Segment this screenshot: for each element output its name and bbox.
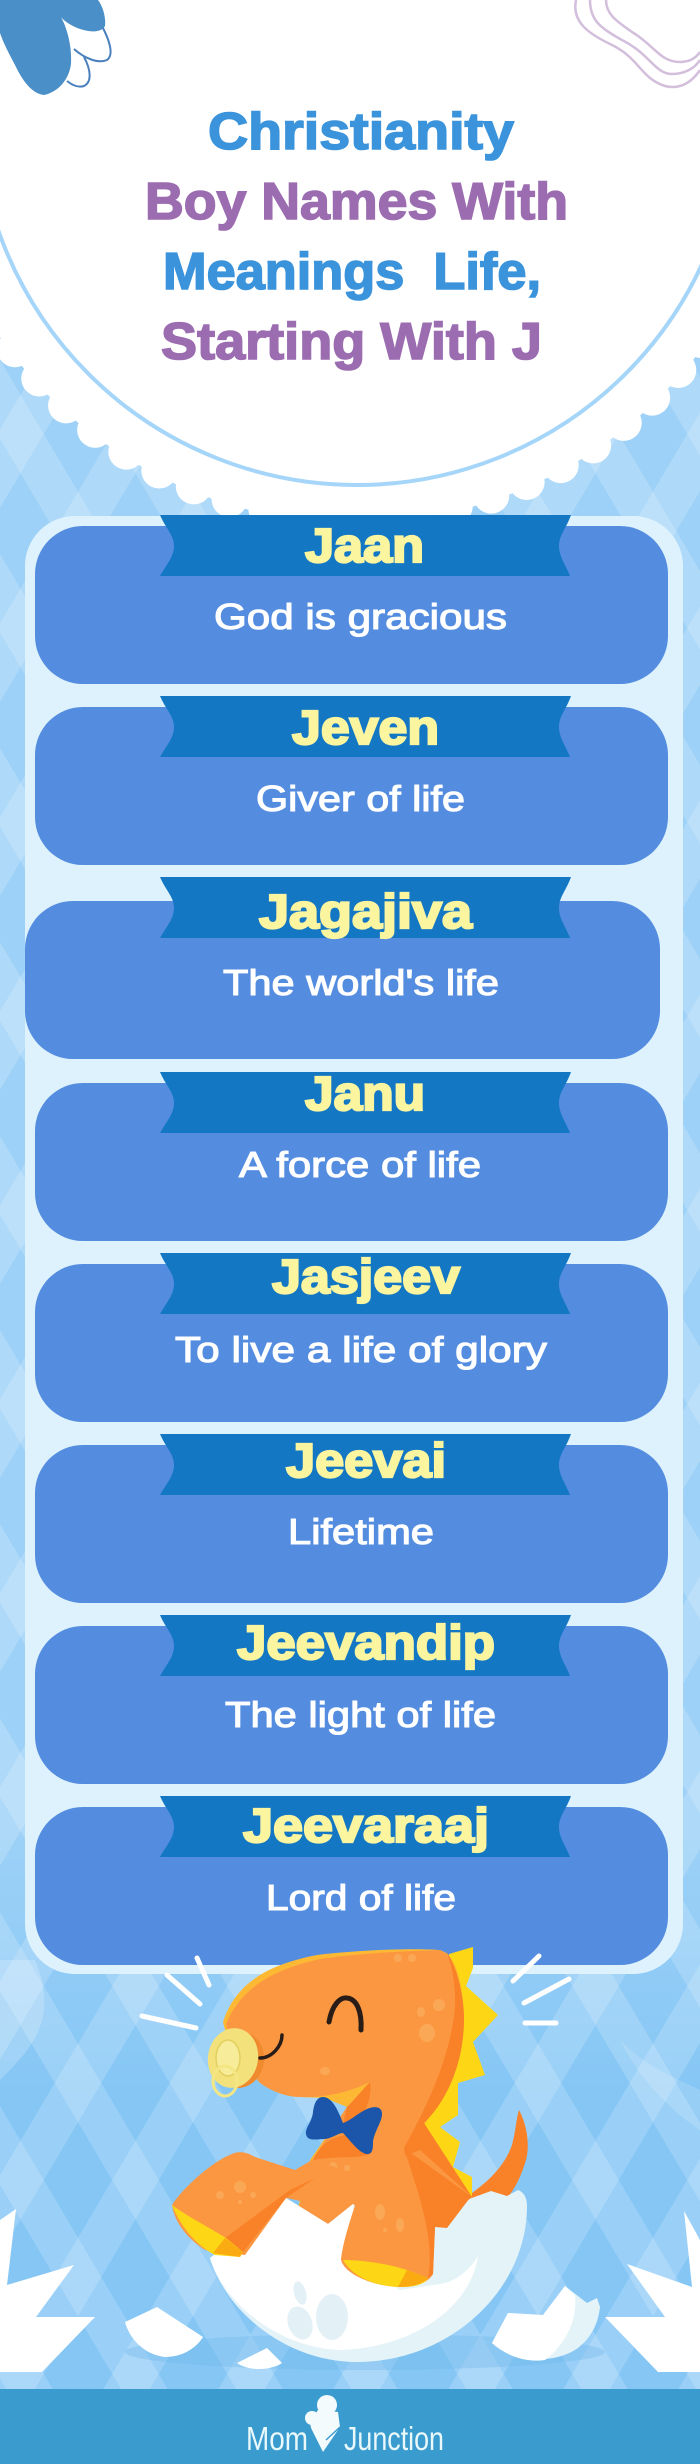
back spikes xyxy=(420,1947,498,2205)
egg shell shard small xyxy=(237,2348,282,2369)
card: Jeevaraaj: Jeevaraaj xyxy=(243,1800,489,1853)
chin shade xyxy=(343,2082,370,2125)
card: Jeven: Jeven xyxy=(292,702,439,755)
icon: hatching baby dinosaur xyxy=(125,1947,605,2370)
panel: names list background xyxy=(25,516,683,1974)
white corner shapes right xyxy=(605,2211,700,2372)
logo: MomJunction: Mom xyxy=(246,2420,308,2457)
footer bar xyxy=(0,2389,700,2464)
bow tie xyxy=(306,2097,382,2154)
title: Christianity xyxy=(208,103,514,161)
egg footprints xyxy=(283,2280,348,2343)
card: Jeevandip xyxy=(35,1615,668,1784)
body spots xyxy=(320,1954,445,2178)
card: Janu: Janu xyxy=(305,1068,425,1121)
logo: MomJunction xyxy=(246,2395,444,2457)
icon: blue corner leaves xyxy=(0,0,111,95)
card: Jagajiva xyxy=(25,877,660,1059)
darker back shade xyxy=(404,1951,472,2240)
card: Jeevai: Lifetime xyxy=(288,1511,434,1552)
card: Jagajiva: Jagajiva xyxy=(259,886,472,939)
egg white highlight xyxy=(210,2198,478,2350)
card: Jeevandip: Jeevandip xyxy=(237,1617,495,1670)
front leg xyxy=(341,2148,472,2287)
pacifier xyxy=(203,2024,269,2096)
egg shell shard right xyxy=(492,2286,600,2361)
card: Janu: A force of life xyxy=(239,1144,481,1185)
sparkle lines xyxy=(142,1956,569,2028)
white scalloped header circle xyxy=(0,0,700,523)
egg shell xyxy=(210,2190,527,2362)
card: Jaan: God is gracious xyxy=(214,596,507,637)
card: Jeevai xyxy=(35,1434,668,1603)
card: Jeevaraaj xyxy=(35,1796,668,1965)
card: Jaan: Jaan xyxy=(305,520,424,573)
card: Jasjeev: Jasjeev xyxy=(272,1251,460,1304)
card: Jeevandip: The light of life xyxy=(225,1694,496,1735)
card: Jaan xyxy=(35,515,668,684)
card: Jeven: Giver of life xyxy=(256,778,465,819)
torso and head edge xyxy=(223,1949,472,2240)
title: Meanings Life, xyxy=(163,243,541,301)
icon: lilac squiggle lines xyxy=(575,0,700,87)
torso and head xyxy=(226,1950,472,2240)
title xyxy=(145,103,568,371)
title: Starting With J xyxy=(161,313,542,371)
card: Jeevai: Jeevai xyxy=(286,1435,446,1488)
ground shadow xyxy=(125,2334,605,2370)
card: Jasjeev: To live a life of glory xyxy=(175,1329,547,1370)
front arm xyxy=(172,2152,352,2257)
card: Janu xyxy=(35,1068,668,1241)
logo: MomJunction: Junction xyxy=(344,2420,444,2457)
tail xyxy=(468,2110,528,2205)
title: Boy Names With xyxy=(145,173,568,231)
card: Jasjeev xyxy=(35,1251,668,1422)
egg shell shard left xyxy=(125,2307,203,2357)
eyes xyxy=(260,1998,361,2058)
card: Jeven xyxy=(35,696,668,865)
card: Jagajiva: The world's life xyxy=(223,962,499,1003)
card: Jeevaraaj: Lord of life xyxy=(266,1877,456,1918)
bow tie shadow xyxy=(313,2135,372,2160)
white corner shapes left xyxy=(0,2209,95,2372)
